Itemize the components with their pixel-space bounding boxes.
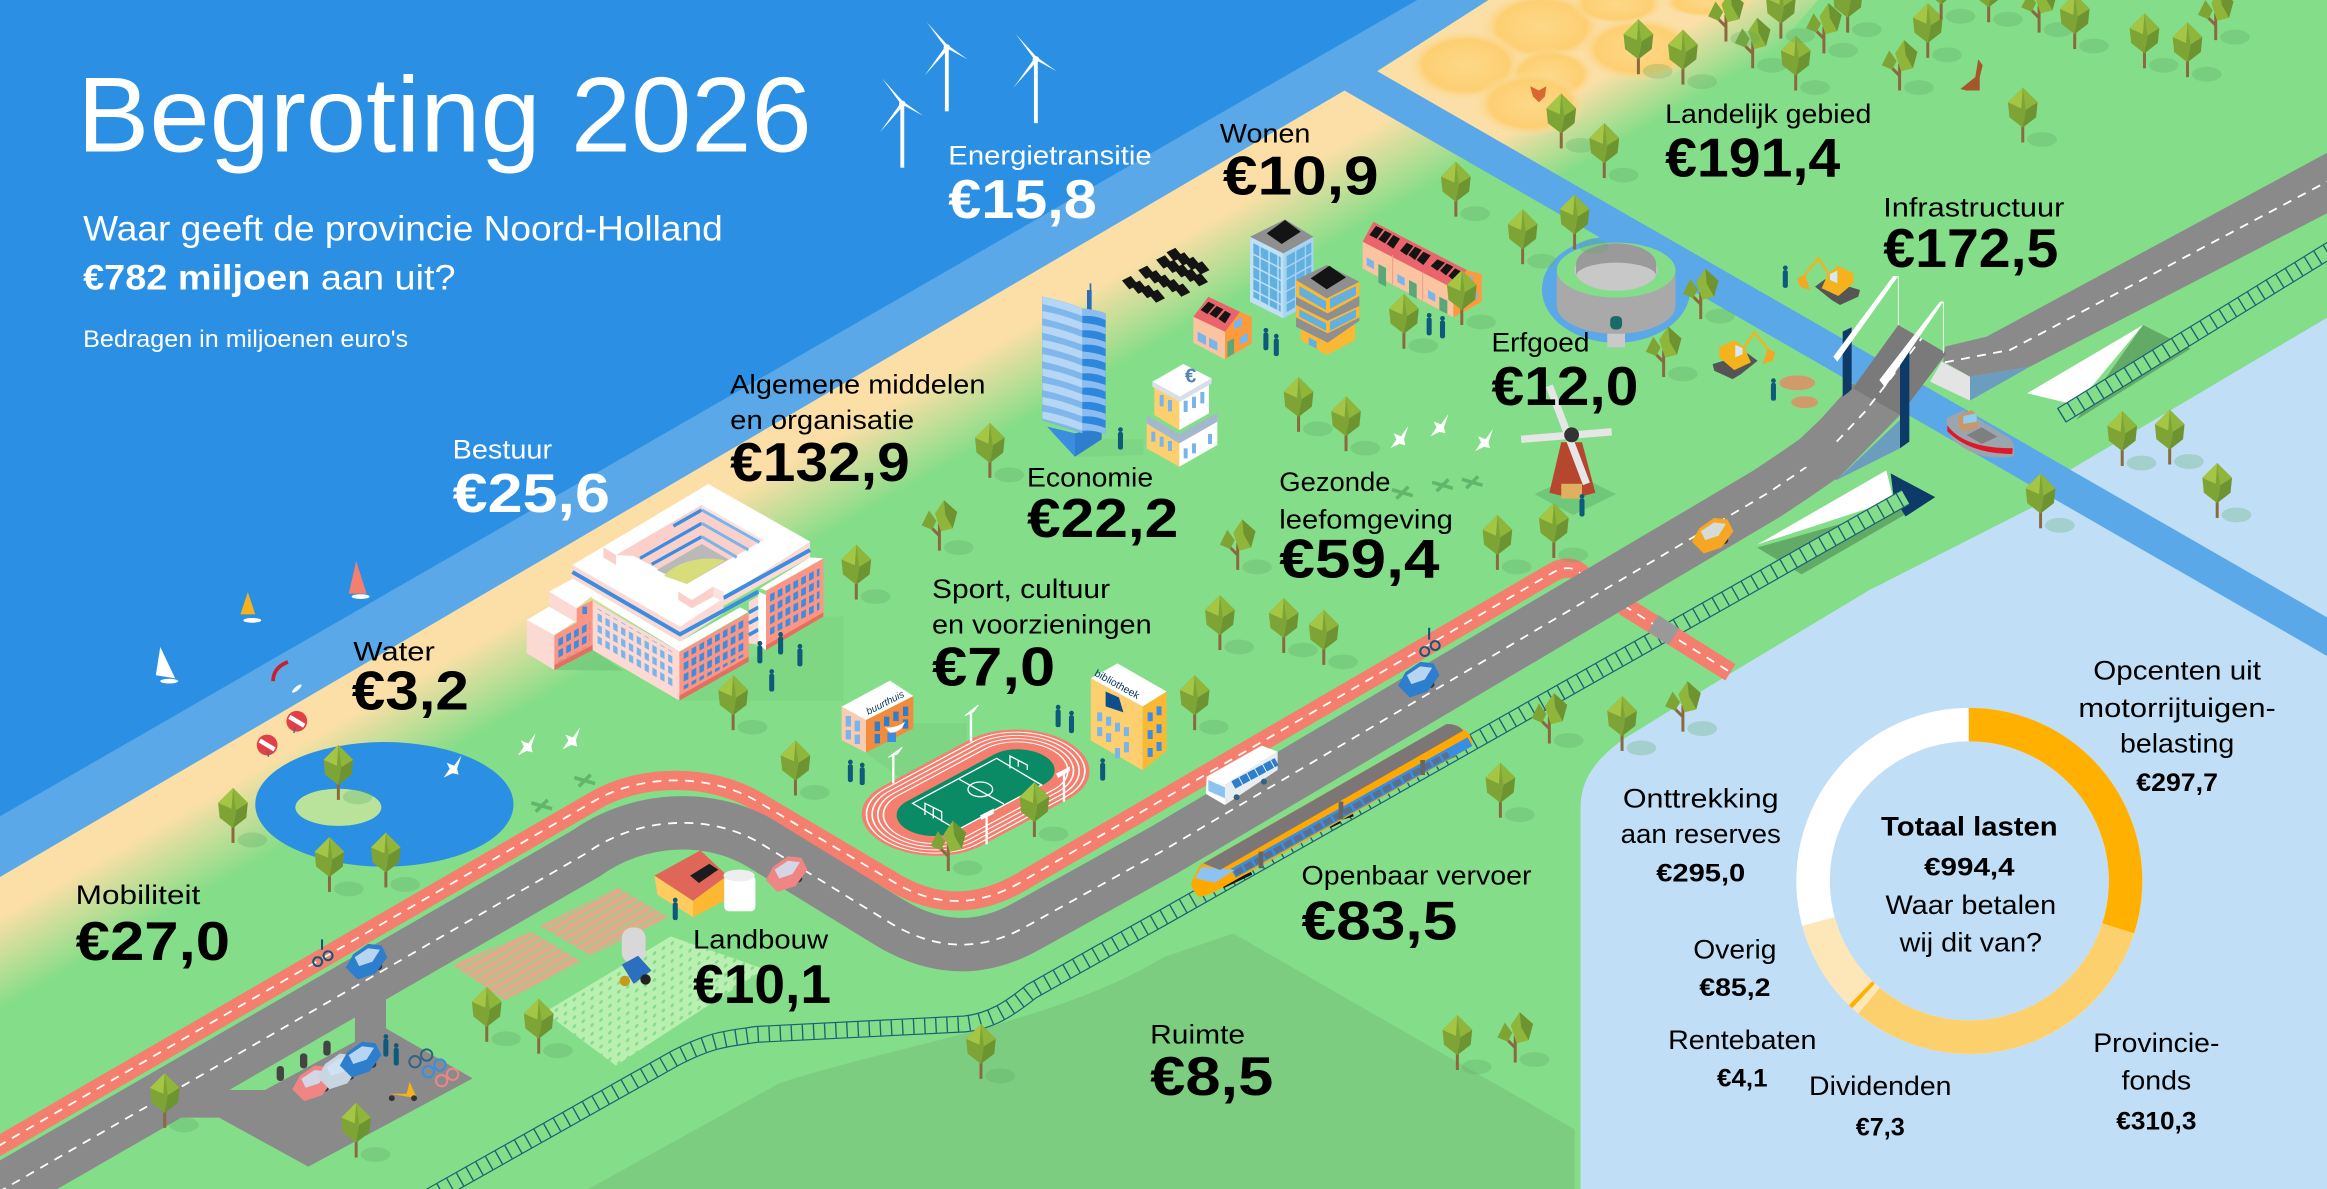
- donut centre text: €994,4: [1924, 854, 2015, 882]
- donut centre text: Waar betalen: [1885, 890, 2056, 920]
- donut label: Provinciefonds: €310,3: [2116, 1107, 2196, 1135]
- windmill: [1521, 386, 1616, 515]
- solar panel field: [1122, 248, 1210, 303]
- sport field and floodlights: [833, 705, 1119, 872]
- building: glass tower: [1042, 283, 1143, 457]
- tunnel ramps: [1757, 325, 2190, 574]
- train: [1191, 724, 1473, 897]
- label: Gezonde leefomgeving: [1279, 467, 1453, 589]
- label: Wonen: Wonen: [1220, 118, 1310, 148]
- label: Energietransitie: €15,8: [948, 168, 1097, 230]
- hill: Ruimte: [586, 933, 1575, 1189]
- title: Begroting 2026: [77, 54, 812, 174]
- farm with silo: [654, 850, 755, 917]
- label: Landelijk gebied: Landelijk gebied: [1665, 99, 1871, 129]
- yellow flats: [1296, 265, 1359, 355]
- fields: [453, 887, 764, 1066]
- donut label: Onttrekking aan reserves: aan reserves: [1621, 819, 1781, 849]
- label: Ruimte: €8,5: [1150, 1045, 1273, 1107]
- label: Gezonde leefomgeving: €59,4: [1279, 527, 1440, 589]
- label: Landbouw: Landbouw: [693, 924, 829, 954]
- donut label: Opcenten: belasting: [2120, 728, 2234, 758]
- label: Economie: [1027, 463, 1178, 549]
- label: Landelijk gebied: €191,4: [1665, 127, 1841, 189]
- link and right wing: [749, 595, 760, 645]
- donut label: Rentebaten: Rentebaten: [1668, 1025, 1816, 1055]
- building: buurthuis: [842, 681, 913, 753]
- donut label: Opcenten: €297,7: [2136, 769, 2218, 797]
- label: Mobiliteit: Mobiliteit: [76, 880, 201, 910]
- label: Gezonde leefomgeving: Gezonde: [1279, 467, 1391, 497]
- label: Erfgoed: [1491, 328, 1638, 417]
- donut chart: income sources: [1813, 725, 2126, 1037]
- donut label: Onttrekking aan reserves: Onttrekking: [1623, 783, 1779, 813]
- people: [383, 265, 1788, 1066]
- label: Gezonde leefomgeving: leefomgeving: [1279, 504, 1453, 534]
- label: Water: [352, 636, 469, 721]
- blue flats: [1250, 219, 1313, 318]
- label: Algemene middelen en organisatie: Algemene middelen: [730, 369, 985, 399]
- building: bibliotheek: [1091, 663, 1166, 770]
- northern land with dunes: [1377, 0, 2327, 470]
- label: Infrastructuur: [1883, 193, 2064, 279]
- lake (right side): [1573, 318, 2327, 1189]
- donut label: Opcenten: [2078, 656, 2276, 797]
- donut label: Provinciefonds: Provincie-: [2093, 1028, 2219, 1058]
- label: Algemene middelen en organisatie: €132,9: [730, 431, 910, 493]
- tractor: [620, 928, 652, 986]
- donut centre text: wij dit van?: [1899, 927, 2042, 957]
- label: Landbouw: €10,1: [693, 953, 831, 1015]
- courtyard: [616, 505, 763, 584]
- bridge with approach road: [1782, 148, 2327, 480]
- label: Bestuur: [453, 435, 610, 524]
- cycle path: [0, 568, 1730, 1171]
- building: bank with euro sign: €: [1185, 365, 1197, 388]
- label: Landelijk gebied: [1665, 99, 1871, 189]
- subtitle: Waar geeft de provincie Noord-Holland: [83, 208, 723, 248]
- donut label: Opcenten: motorrijtuigen-: [2078, 693, 2276, 723]
- housing cluster: [1193, 219, 1482, 359]
- donut label: Provinciefonds: fonds: [2121, 1065, 2191, 1095]
- donut label: Overig: €85,2: [1699, 974, 1770, 1002]
- label: Mobiliteit: [76, 880, 230, 972]
- donut label: Dividenden: Dividenden: [1809, 1071, 1952, 1101]
- label: Energietransitie: Energietransitie: [948, 141, 1152, 171]
- fort (Erfgoed): [1542, 236, 1690, 347]
- railway: [430, 223, 2327, 1189]
- donut centre text: Totaal lasten: [1881, 812, 2058, 842]
- scooter and cyclists: [313, 628, 1440, 1101]
- building: bibliotheek: bibliotheek: [1092, 668, 1142, 702]
- label: Algemene middelen en organisatie: en organisatie: [730, 405, 914, 435]
- bus: [1206, 746, 1278, 805]
- donut label: Provinciefonds: [2093, 1028, 2219, 1135]
- label: Water: €3,2: [352, 659, 469, 721]
- label: Economie: Economie: [1027, 463, 1153, 493]
- label: Bestuur: €25,6: [453, 462, 610, 524]
- ship: [1947, 410, 2014, 458]
- label: Ruimte: Ruimte: [1150, 1019, 1245, 1049]
- lake and island: [255, 742, 513, 867]
- building: bank with euro sign: [1147, 364, 1217, 467]
- label: Infrastructuur: Infrastructuur: [1883, 193, 2064, 223]
- central block roof: [572, 484, 810, 642]
- donut label: Overig: Overig: [1693, 935, 1776, 965]
- label: Ruimte: [1150, 1019, 1273, 1107]
- donut label: Rentebaten: [1668, 1025, 1816, 1092]
- parking lot: [163, 990, 473, 1167]
- wind turbines: [880, 22, 1057, 168]
- label: Erfgoed: Erfgoed: [1491, 328, 1589, 358]
- main road: [0, 401, 1873, 1189]
- label: Water: Water: [353, 636, 435, 666]
- donut label: Onttrekking aan reserves: [1621, 783, 1781, 888]
- animals: fox and deer: [1530, 59, 1983, 102]
- label: Sport, cultuur en voorzieningen: [932, 574, 1152, 698]
- vehicles: [292, 518, 1733, 1101]
- donut label: Opcenten: Opcenten uit: [2093, 656, 2262, 686]
- label: Bestuur: Bestuur: [453, 435, 552, 465]
- canal: [1345, 71, 2327, 656]
- label: Landbouw: [693, 924, 831, 1015]
- label: Sport, cultuur en voorzieningen: Sport, cultuur: [932, 574, 1110, 604]
- donut centre text: [1881, 812, 2058, 957]
- row houses: [1363, 222, 1482, 317]
- label: Openbaar vervoer: €83,5: [1302, 889, 1457, 951]
- label: Sport, cultuur en voorzieningen: €7,0: [932, 636, 1055, 698]
- roof blocks: [603, 547, 616, 565]
- donut label: Dividenden: €7,3: [1856, 1113, 1905, 1141]
- front wing: [593, 602, 679, 701]
- label: Energietransitie: [948, 141, 1152, 230]
- label: Infrastructuur: €172,5: [1883, 217, 2058, 279]
- building: buurthuis: buurthuis: [865, 689, 906, 718]
- label: Openbaar vervoer: [1302, 860, 1532, 951]
- birds: [444, 414, 1493, 812]
- donut label: Dividenden: [1809, 1071, 1952, 1141]
- note: amounts in millions: Bedragen in miljoenen euro's: [83, 327, 408, 353]
- building: provinciehuis: [527, 484, 843, 701]
- excavators and sand piles: [1713, 258, 1860, 408]
- donut label: Overig: [1693, 935, 1776, 1002]
- left annex: [527, 578, 597, 670]
- label: Wonen: €10,9: [1223, 144, 1379, 206]
- label: Mobiliteit: €27,0: [76, 910, 230, 972]
- donut label: Rentebaten: €4,1: [1717, 1064, 1768, 1092]
- donut label: Onttrekking aan reserves: €295,0: [1656, 860, 1745, 888]
- label: Economie: €22,2: [1027, 487, 1178, 549]
- label: Sport, cultuur en voorzieningen: en voorzieningen: [932, 610, 1152, 640]
- charging poles: [277, 1041, 331, 1081]
- label: Openbaar vervoer: Openbaar vervoer: [1302, 860, 1532, 890]
- boats and beach items: [156, 561, 370, 757]
- label: Wonen: [1220, 118, 1379, 206]
- label: Algemene middelen en organisatie: [730, 369, 985, 493]
- bicycles: [409, 1049, 458, 1086]
- subtitle amount: €782 miljoen aan uit?: [83, 257, 456, 297]
- label: Erfgoed: €12,0: [1491, 355, 1638, 417]
- small house: [1193, 297, 1252, 359]
